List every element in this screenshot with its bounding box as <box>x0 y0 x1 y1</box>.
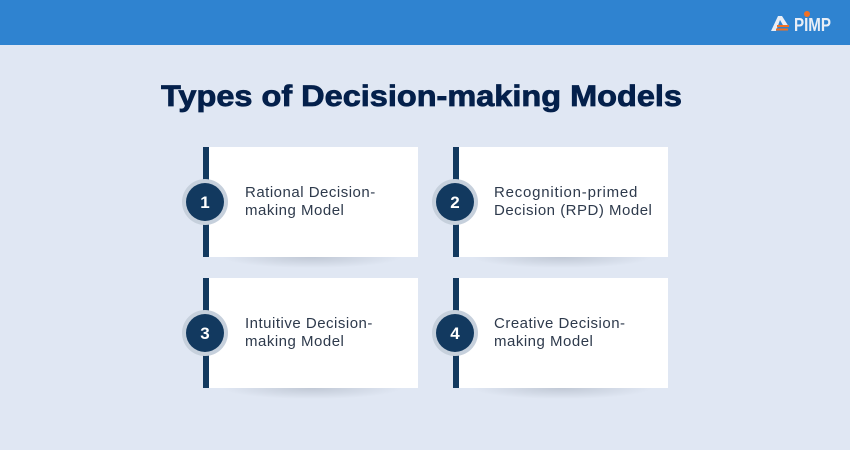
card 2 text: Recognition-primed <box>494 184 638 201</box>
card 2 text: Decision (RPD) Model <box>494 202 652 218</box>
card 1 text: Rational Decision- <box>245 184 376 201</box>
shadow: card 3 <box>222 388 402 399</box>
panel: card 1 <box>203 147 418 257</box>
card 3 text: Intuitive Decision- <box>245 315 373 332</box>
panel: card 4 <box>453 278 668 388</box>
logo wordmark: PIMP <box>794 15 831 35</box>
icon: logo triangle <box>771 16 789 31</box>
card 4 text <box>494 315 626 350</box>
shadow: card 1 <box>222 257 402 268</box>
number 2 <box>436 183 474 221</box>
header band <box>0 0 850 45</box>
number 4 <box>436 314 474 352</box>
shadow: card 2 <box>472 257 652 268</box>
panel: card 2 <box>453 147 668 257</box>
icon: logo orange dot <box>804 11 810 17</box>
number 1: 1 <box>200 193 210 212</box>
number 3: 3 <box>200 324 210 343</box>
number 3 <box>186 314 224 352</box>
number 2: 2 <box>450 193 460 212</box>
card 1 text <box>245 184 376 218</box>
number 1 <box>186 183 224 221</box>
card 4 text: making Model <box>494 332 593 350</box>
panel: card 3 <box>203 278 418 388</box>
title: Types of Decision-making Models <box>161 80 682 113</box>
number 4: 4 <box>450 324 460 343</box>
card 2 text <box>494 184 652 218</box>
card 3 text <box>245 315 373 350</box>
card 4 text: Creative Decision- <box>494 315 626 332</box>
shadow: card 4 <box>472 388 652 399</box>
logo <box>771 11 831 35</box>
card 3 text: making Model <box>245 332 344 350</box>
card 1 text: making Model <box>245 202 344 218</box>
